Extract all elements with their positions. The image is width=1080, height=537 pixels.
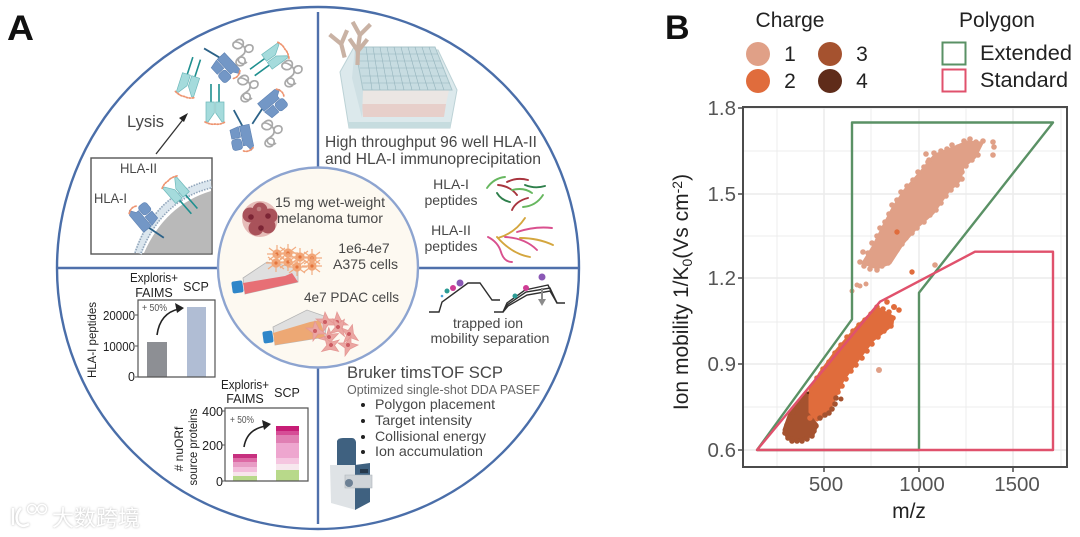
bar chart: nuORf source proteins: Exploris+ — [221, 378, 269, 392]
bar chart: HLA-I peptides: 10000 — [103, 340, 135, 354]
text: HLA-II peptides — [424, 222, 478, 254]
text: immunoprecipitation caption — [325, 134, 541, 168]
icon: melanoma tumor — [242, 201, 278, 237]
bar chart: HLA-I peptides: FAIMS — [135, 286, 173, 300]
quadrant: bar charts — [85, 271, 308, 489]
y axis: 1.2 — [708, 267, 736, 290]
legend: charge — [746, 9, 868, 93]
legend: charge: 4 — [856, 70, 868, 93]
watermark: 大数跨境 — [52, 506, 140, 531]
x axis — [809, 467, 1040, 523]
panel label B: B — [665, 9, 690, 47]
legend: charge: 2 — [784, 70, 796, 93]
panel A: workflow circle — [57, 7, 579, 529]
y axis: 1.8 — [708, 97, 736, 120]
x axis: 1500 — [994, 473, 1040, 496]
bar chart: nuORf source proteins: 200 — [202, 439, 223, 453]
points: charge 3 — [782, 392, 844, 444]
bar chart: nuORf source proteins: 400 — [202, 405, 223, 419]
legend: polygon: Standard — [980, 69, 1068, 92]
text: A375 cells — [333, 240, 398, 272]
bar chart: HLA-I peptides: HLA-I peptides — [85, 302, 99, 378]
text: tumor sample: melanoma tumor — [277, 210, 383, 226]
text: Bruker timsTOF SCP: Bruker timsTOF SCP — [347, 363, 503, 382]
bar chart: nuORf source proteins: # nuORf — [172, 426, 186, 471]
quadrant: timsTOF acquisition — [330, 274, 565, 510]
bar chart: nuORf source proteins — [172, 378, 308, 489]
text: trapped ion mobility separation: mobility separation — [430, 330, 550, 346]
icon: HLA-II peptides — [488, 218, 553, 262]
polygon: standard — [757, 252, 1053, 450]
plot frame — [743, 107, 1067, 467]
list: optimized parameters: Target intensity — [375, 412, 472, 428]
y axis: 0.6 — [708, 439, 736, 462]
text: HLA-II peptides: peptides — [424, 238, 478, 254]
text: tumor sample: 15 mg wet-weight — [275, 194, 385, 210]
y axis: (Vs cm — [670, 193, 693, 259]
points: charge 2 — [805, 269, 915, 420]
bar chart: nuORf source proteins: 0 — [216, 475, 223, 489]
text: HLA-II: HLA-II — [120, 161, 157, 176]
list: optimized parameters: Ion accumulation — [375, 443, 483, 459]
icon: PDAC flask and cells — [262, 310, 363, 360]
legend: charge: Charge — [756, 9, 824, 32]
text: Lysis: Lysis — [127, 112, 164, 131]
y axis: -2 — [669, 181, 685, 193]
x axis: 1000 — [899, 473, 945, 496]
inset: HLA complexes on the cell membrane — [91, 158, 212, 254]
icon: trapped ion mobility — [429, 274, 565, 312]
bar chart: HLA-I peptides: 0 — [128, 370, 135, 384]
bar chart: HLA-I peptides: + 50% — [142, 303, 167, 314]
y axis: 1.5 — [708, 183, 736, 206]
text: tumor sample — [275, 194, 385, 226]
text: HLA-I peptides — [424, 176, 478, 208]
legend: charge: 3 — [856, 43, 868, 66]
legend: polygon: Polygon — [959, 9, 1035, 32]
icon: A375 flask and cells — [231, 244, 322, 294]
bar chart: nuORf source proteins: + 50% — [230, 415, 254, 426]
arrow: lysis — [156, 113, 188, 154]
list: optimized parameters: Collisional energy — [375, 428, 486, 444]
icon: HLA-I peptides — [487, 177, 545, 210]
text: HLA-II peptides: HLA-II — [431, 222, 471, 238]
y axis: 0 — [679, 258, 695, 266]
released proteins — [175, 39, 302, 154]
legend: charge: 1 — [784, 43, 796, 66]
points: charge 4 — [807, 392, 809, 394]
plot grid — [743, 107, 1067, 467]
text: PDAC cells: 4e7 PDAC cells — [304, 289, 399, 305]
legend: polygon — [942, 9, 1072, 92]
watermark — [13, 504, 140, 531]
scatter plot: m/z vs ion mobility — [669, 97, 1067, 523]
points: charge 1 — [850, 136, 997, 373]
text: HLA-I peptides: HLA-I — [433, 176, 469, 192]
bar chart: HLA-I peptides: SCP — [183, 280, 209, 294]
bar chart: nuORf source proteins: FAIMS — [226, 392, 264, 406]
text: A375 cells: A375 cells — [333, 256, 398, 272]
bar chart: nuORf source proteins: SCP — [274, 386, 300, 400]
text: immunoprecipitation caption: High throughput 96 well HLA-II — [325, 134, 537, 151]
quadrant: lysis of cells — [91, 39, 302, 254]
text: immunoprecipitation caption: and HLA-I immunoprecipitation — [325, 151, 541, 168]
y axis: 0.9 — [708, 353, 736, 376]
legend: polygon: Extended — [980, 42, 1072, 65]
center circle: sample inputs — [218, 168, 418, 368]
x axis: m/z — [892, 500, 926, 523]
y axis: Ion mobility 1/K — [670, 266, 693, 410]
bar chart: HLA-I peptides — [85, 271, 215, 384]
text: trapped ion mobility separation — [430, 315, 550, 346]
panel label A: A — [7, 9, 34, 48]
list: optimized parameters: Polygon placement — [375, 396, 495, 412]
polygon: extended — [757, 122, 1053, 450]
bar chart: nuORf source proteins: source proteins — [186, 408, 200, 486]
bar chart: HLA-I peptides: 20000 — [103, 309, 135, 323]
x axis: 500 — [809, 473, 843, 496]
icon: 96 well plate — [330, 22, 457, 128]
y axis — [669, 97, 743, 462]
text: acquisition method: Optimized single-shot DDA PASEF — [347, 382, 540, 397]
quadrant: immunoprecipitation — [325, 22, 553, 262]
text: trapped ion mobility separation: trapped ion — [453, 315, 523, 331]
text: A375 cells: 1e6-4e7 — [338, 240, 390, 256]
y axis: ) — [670, 174, 693, 181]
bar chart: HLA-I peptides: Exploris+ — [130, 271, 178, 285]
text: HLA-I peptides: peptides — [424, 192, 478, 208]
icon: mass spectrometer — [330, 438, 372, 510]
list: optimized parameters — [361, 396, 495, 459]
text: HLA-I: HLA-I — [94, 191, 127, 206]
